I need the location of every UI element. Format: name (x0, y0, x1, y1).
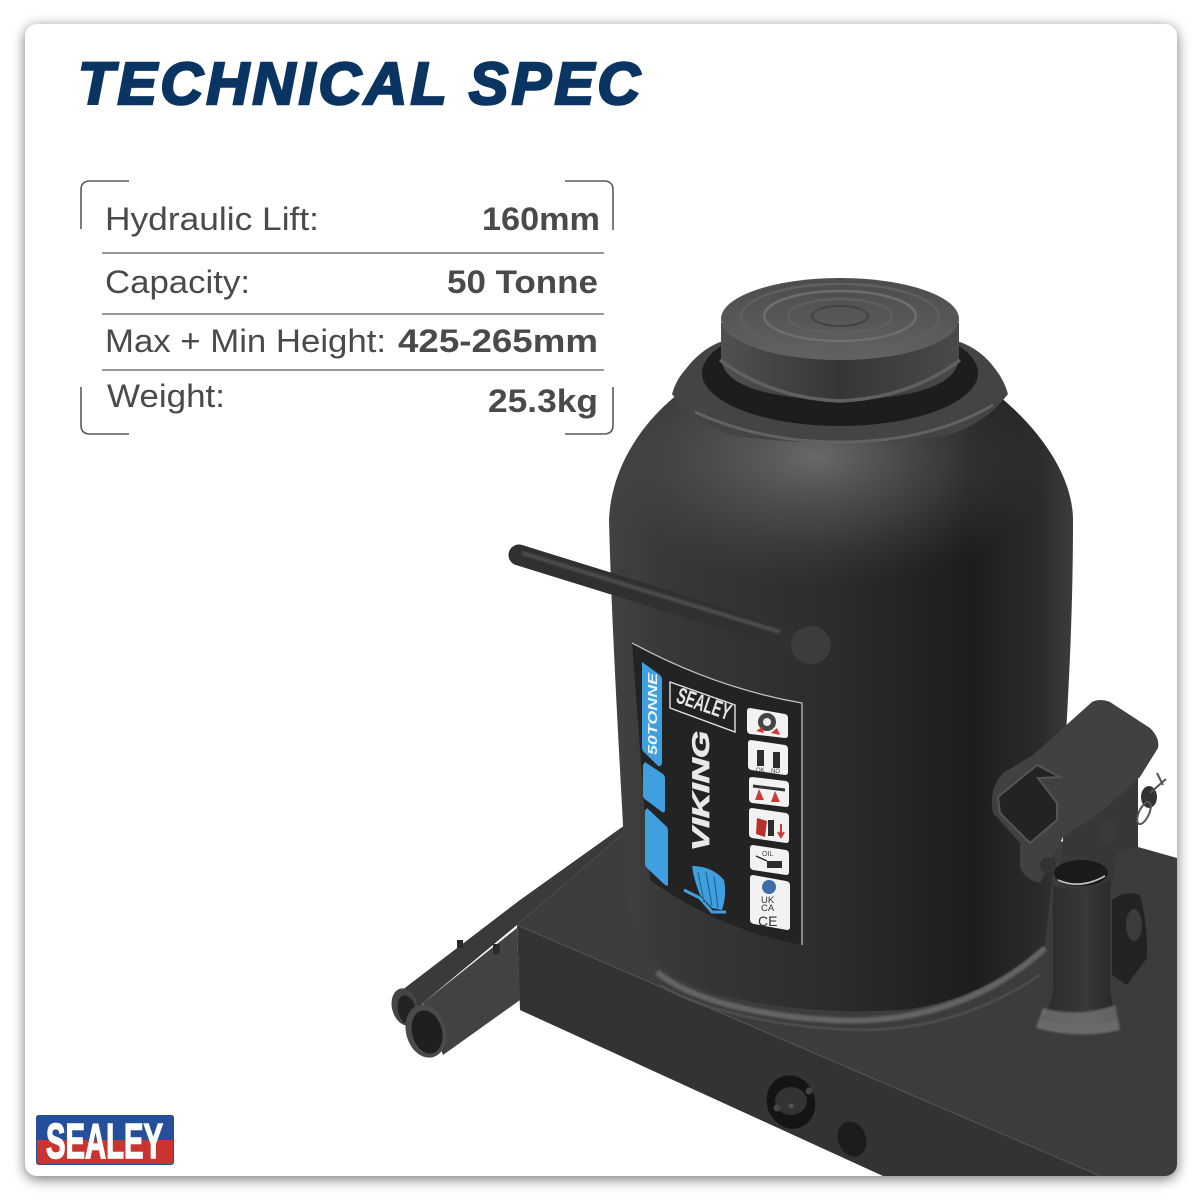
title: TECHNICAL SPEC (78, 51, 641, 117)
bottle jack product image (388, 278, 1177, 1200)
sealey mark on label (670, 682, 735, 732)
base bolt hole (838, 1122, 866, 1156)
icon: correct jack use (748, 740, 788, 775)
dome highlight (626, 398, 1007, 556)
sealey mark on label: SEALEY (673, 682, 735, 725)
sealey logo (36, 1115, 174, 1169)
icon: correct jack use: OK (756, 768, 765, 774)
lever socket (992, 700, 1158, 883)
base weld bead (657, 948, 1045, 1021)
handle socket tubes (388, 825, 625, 1062)
rear tube (404, 826, 624, 1006)
lever handle bar (519, 553, 831, 664)
capacity badge (642, 662, 662, 766)
sticker label (632, 643, 802, 945)
pivot bolts (1098, 818, 1116, 844)
row: hydraulic lift: 160mm (482, 201, 600, 237)
row: capacity: Capacity: (105, 264, 250, 300)
icon: split pin (1134, 773, 1166, 826)
base top surface (517, 832, 1177, 1200)
icon: axle stands (749, 777, 789, 807)
ram saddle with rings (721, 278, 959, 360)
icon: ukca and ce marks: CA (761, 903, 775, 914)
top collar and ram (672, 278, 1008, 443)
icon: ukca and ce marks: CE (758, 913, 777, 929)
row: weight (107, 378, 598, 419)
icon: correct jack use: NO (771, 769, 780, 775)
info badge (645, 808, 668, 886)
jack cylinder body (609, 397, 1073, 1032)
icon: viking ship (684, 866, 726, 912)
row: hydraulic lift (105, 201, 600, 237)
table frame corners (81, 181, 613, 434)
spec table (81, 181, 613, 434)
pump cylinder (1047, 880, 1118, 1020)
release valve (766, 1076, 816, 1128)
base front face (517, 926, 1099, 1176)
row: max and min height (105, 323, 598, 359)
icon: oil can (750, 845, 789, 875)
row: weight: 25.3kg (488, 383, 598, 419)
front tube (423, 928, 520, 1055)
icon: ukca and ce marks: UK (761, 895, 775, 906)
tube locking pins (457, 940, 500, 954)
safety icons (747, 708, 790, 930)
viking logotype: VIKING (688, 731, 715, 851)
pump bracket (1062, 778, 1138, 847)
row: capacity: 50 Tonne (447, 264, 598, 300)
model badge (643, 762, 665, 812)
row: max and min height: Max + Min Height: (105, 323, 386, 359)
icon: lowering warning (749, 808, 789, 843)
icon: ukca and ce marks (750, 875, 790, 930)
bolt plate (1112, 893, 1147, 985)
row: capacity (105, 264, 598, 300)
icon: wheel chocks (747, 708, 788, 738)
jack base plate (517, 832, 1177, 1200)
icon: oil can: OIL (762, 851, 773, 858)
socket opening (998, 765, 1060, 843)
row: hydraulic lift: Hydraulic Lift: (105, 201, 319, 237)
row: weight: Weight: (107, 378, 225, 414)
hydraulic pump assembly (992, 700, 1166, 1035)
sealey logo: SEALEY (46, 1115, 163, 1169)
capacity badge: 50TONNE (645, 673, 660, 755)
row: max and min height: 425-265mm (398, 323, 598, 359)
